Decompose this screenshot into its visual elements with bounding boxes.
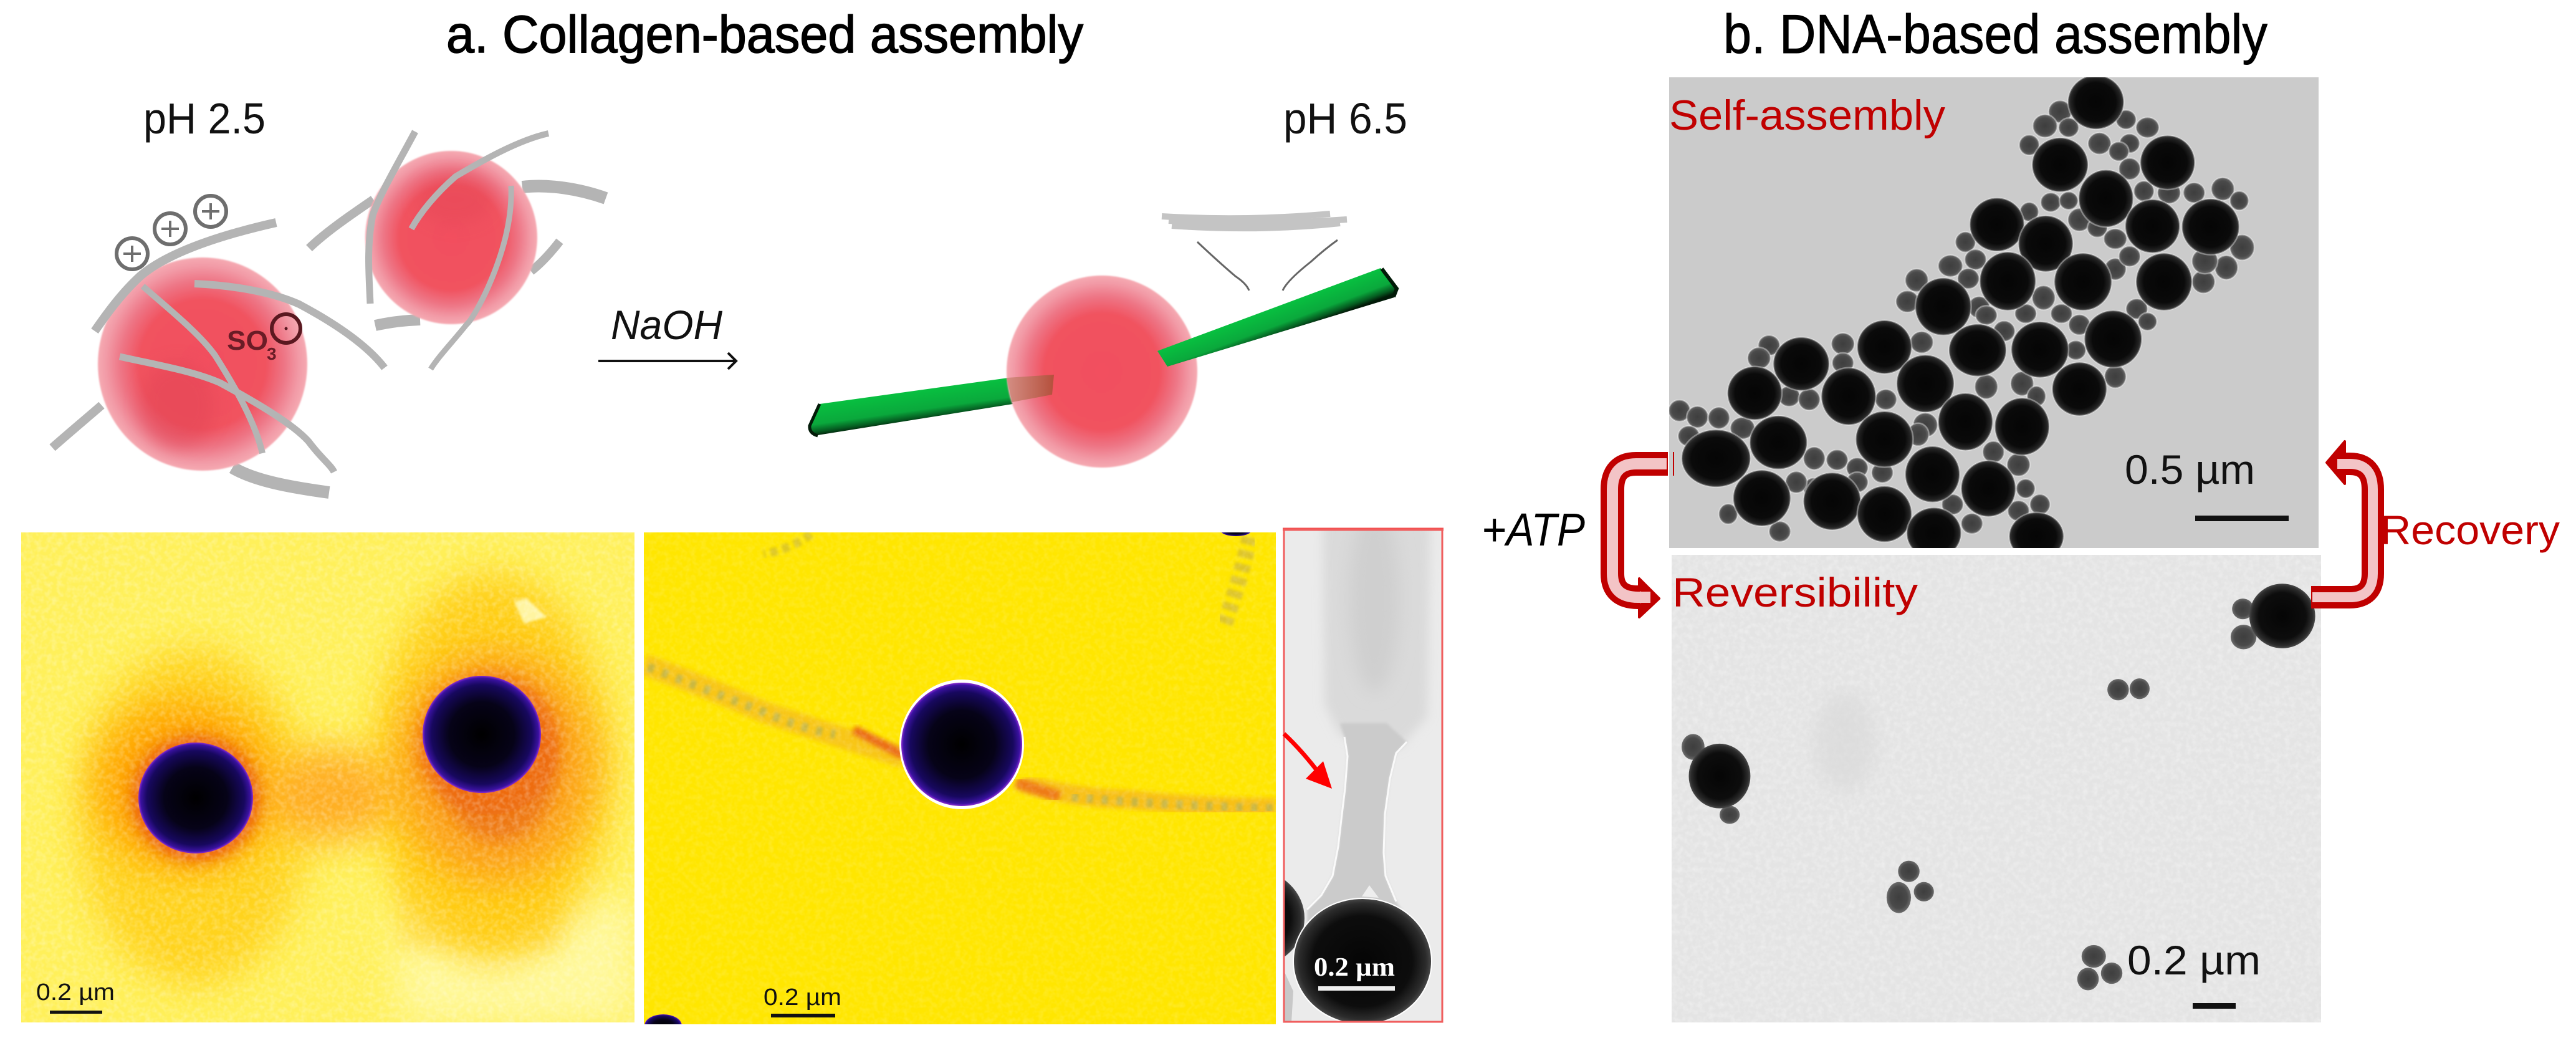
dispersed particles: [1682, 584, 2315, 990]
particle 2: [423, 676, 541, 793]
corner particles: [644, 1014, 682, 1024]
red arrow: [1284, 734, 1332, 789]
fibers behind the particle: [52, 405, 329, 493]
sulfonate charge: SO: [227, 325, 268, 356]
label: pH 2.5: pH 2.5: [143, 94, 266, 143]
panel: EFTEM map with two particles at pH 2.5: [21, 532, 634, 1022]
red particle body: [1007, 276, 1197, 468]
faint smudge: [1814, 692, 1876, 792]
fibril stem: [1307, 723, 1410, 923]
satellites and core particles: [1669, 75, 2254, 560]
label: Recovery: Recovery: [2380, 507, 2560, 553]
title: b. DNA-based assembly: b. DNA-based assembly: [1723, 3, 2267, 65]
foreground fibers: [369, 132, 548, 369]
label: Reversibility: Reversibility: [1672, 569, 1918, 615]
label: +ATP: +ATP: [1482, 504, 1585, 555]
diagram: particle with green collagen fibril at pH 6.5: [810, 214, 1398, 468]
left green rod: [810, 378, 1013, 436]
large core particles: [1682, 75, 2239, 560]
scale bar 0.5 µm: [2125, 446, 2289, 521]
gold particle: [1293, 898, 1432, 1024]
panel: TEM reversibility: [1672, 555, 2321, 1022]
panel: TEM close-up of fibril and particle: [1201, 505, 1444, 1024]
scale bar 0.2 µm: 0.2 µm: [1314, 953, 1395, 982]
small satellite particles: [1669, 100, 2254, 542]
label: NaOH reaction arrow: NaOH: [611, 302, 722, 348]
background fibers: [309, 186, 606, 325]
particle 1: [138, 743, 253, 853]
scale bar 0.2 µm: [2127, 937, 2261, 1009]
scale bar 0.2 µm: 0.2 µm: [2127, 937, 2261, 983]
sulfonate charge: [227, 314, 300, 363]
panel: TEM self-assembly: [1669, 75, 2319, 560]
sulfonate charge: 3: [267, 344, 277, 363]
neighbour particle: [1201, 870, 1305, 967]
stem rim highlights: [1307, 737, 1407, 910]
fibers over the particle: [95, 223, 385, 472]
diagram: nanoparticle with collagen fibers, upper middle: [309, 132, 606, 369]
red particle body: [365, 151, 537, 324]
positive charges: [117, 196, 226, 269]
title: a. Collagen-based assembly: a. Collagen-based assembly: [446, 5, 1083, 64]
arrow: +ATP, self-assembly to reversibility: [1612, 452, 1673, 617]
scale bar 0.2 µm: 0.2 µm: [764, 984, 841, 1011]
rod seen through particle: [1007, 375, 1054, 402]
particle with bright rim: [899, 680, 1024, 809]
label: pH 6.5: pH 6.5: [1283, 94, 1407, 143]
scale bar 0.2 µm: [37, 984, 113, 1014]
zoom lines: [1197, 240, 1338, 291]
fibril bands: [644, 534, 1276, 809]
red particle body: [98, 257, 307, 471]
red frame: [1283, 527, 1444, 531]
fibril wide upper part: [1323, 517, 1430, 748]
panel: EFTEM map with fibril through particle at pH 6.5: [644, 526, 1276, 1037]
grey fibril bundle: [1162, 214, 1347, 228]
scale bar 0.5 µm: 0.5 µm: [2125, 446, 2255, 493]
arrow: recovery, reversibility to self-assembly: [2311, 441, 2373, 597]
scale bar 0.2 µm: 0.2 µm: [36, 979, 115, 1006]
label: Self-assembly: Self-assembly: [1669, 92, 1945, 139]
diagram: nanoparticle with collagen fibers, lower left: [52, 196, 385, 493]
right green rod: [1157, 268, 1398, 367]
label: NaOH reaction arrow: [598, 302, 736, 369]
